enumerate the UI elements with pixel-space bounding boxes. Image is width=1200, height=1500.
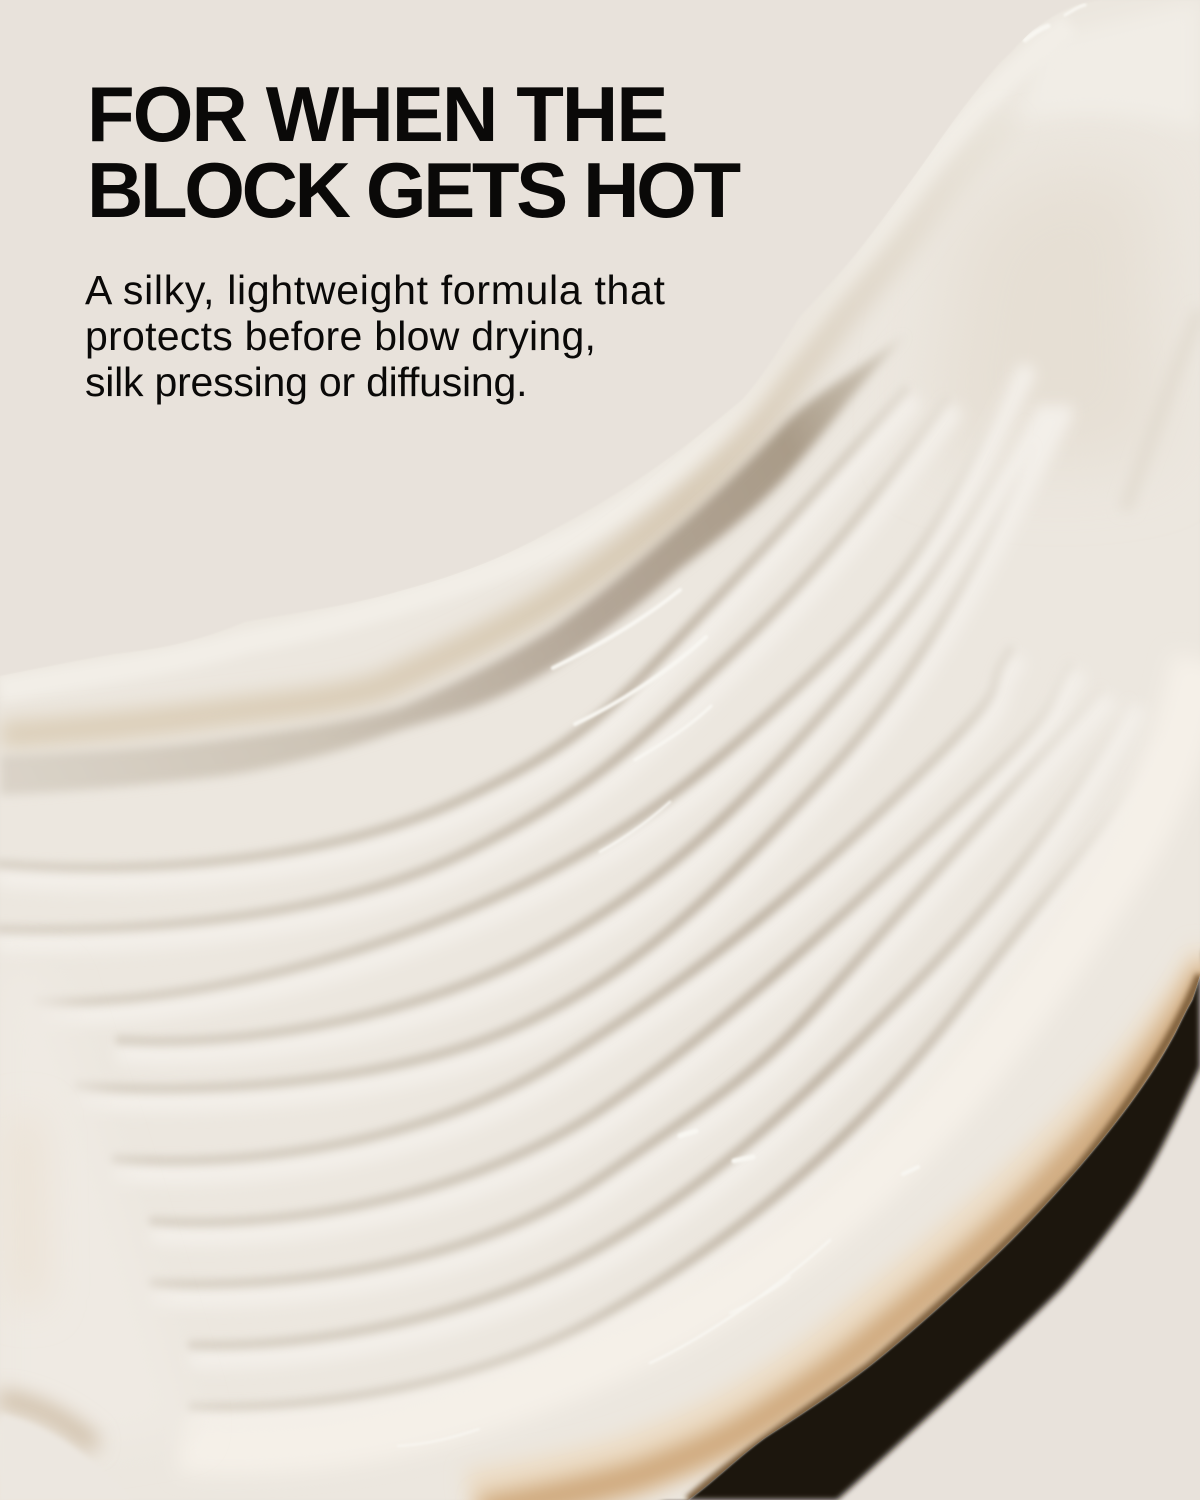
beige centre of upper right fold [964,196,1134,439]
ridge sheen below grooves [5,374,1165,1421]
bottom left background patch [0,1414,134,1500]
right side light fold [1126,318,1198,502]
title: BLOCK GETS HOT [87,146,738,234]
body text: protects before blow drying, [85,313,596,359]
warm lip band [0,120,1010,735]
dark outer rim edge [688,975,1200,1500]
bright rim band [180,660,1200,1447]
bottom left warm fold edge [5,1400,90,1442]
body text: silk pressing or diffusing. [85,359,527,405]
body text [85,267,666,405]
warm rim shading [480,970,1200,1500]
specular highlights [550,4,1086,1363]
title [87,70,740,234]
lip highlight along top edge [968,72,1007,116]
bright top right corner [1176,100,1178,102]
title: FOR WHEN THE [87,70,666,158]
left bright area covering groove starts [32,996,90,1091]
deep shadow under lip [0,335,905,795]
cast shadow along lower edge [660,950,1200,1500]
ridge grooves [0,360,1160,1407]
body text: A silky, lightweight formula that [85,267,666,313]
left warm fold [25,1130,28,1290]
warm rim glow [470,960,1200,1500]
